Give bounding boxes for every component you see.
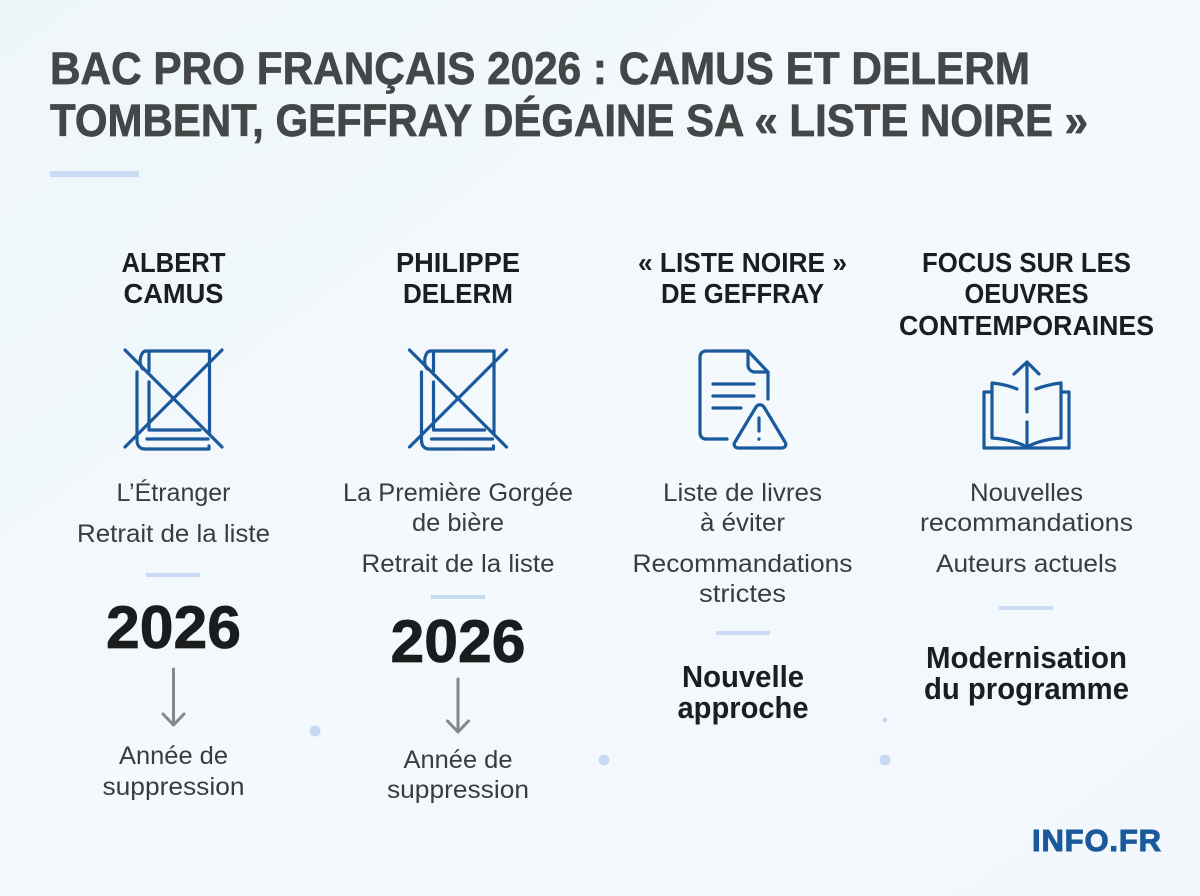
title: TOMBENT, GEFFRAY DÉGAINE SA « LISTE NOIRE » [50,95,1088,146]
text: L'Étranger, retrait: L’Étranger [116,478,230,507]
heading: Albert Camus [122,247,226,309]
icon: document with warning [700,351,786,448]
statement: modernisation du programme [924,640,1129,706]
heading: liste noire de Geffray: DE GEFFRAY [661,278,824,309]
text: nouvelles recommandations, auteurs actuels: recommandations [920,509,1133,537]
heading: liste noire de Geffray: « LISTE NOIRE » [638,247,847,278]
text: nouvelles recommandations, auteurs actuels: Nouvelles [970,479,1083,507]
icon: crossed-out book [410,350,506,449]
caption: année de suppression: suppression [387,776,529,804]
heading: focus sur les oeuvres contemporaines: FOCUS SUR LES [922,247,1131,278]
heading: focus sur les oeuvres contemporaines [899,247,1154,341]
title [50,43,1088,146]
text: liste de livres, recommandations: strictes [699,580,786,608]
text: L'Étranger, retrait: Retrait de la liste [77,520,270,548]
arrow: down [448,679,468,732]
caption: année de suppression: Année de [119,742,228,770]
heading: Philippe Delerm: DELERM [403,278,513,309]
text: La Première Gorgée de bière, retrait: La Première Gorgée [343,479,573,507]
panel: oeuvres contemporaines [899,247,1154,706]
text: liste de livres, recommandations [632,479,852,608]
title underline [50,171,139,177]
caption: année de suppression: suppression [102,773,244,801]
heading: liste noire de Geffray [638,247,847,309]
text: La Première Gorgée de bière, retrait: de bière [412,509,504,537]
heading: focus sur les oeuvres contemporaines: OEUVRES [964,278,1088,309]
text: L'Étranger, retrait [77,478,270,548]
statement: modernisation du programme: Modernisation [926,640,1127,675]
text: liste de livres, recommandations: Recommandations [632,550,852,578]
text: nouvelles recommandations, auteurs actuels [920,479,1133,578]
logo: INFO.FR: INFO.FR [1032,823,1161,858]
arrow: down [163,669,184,725]
heading: focus sur les oeuvres contemporaines: CONTEMPORAINES [899,310,1154,341]
caption: année de suppression [102,742,244,801]
icon: open book with up arrow [984,362,1069,448]
decorative dots [310,718,890,766]
year: 2026: 2026 [390,608,526,675]
title: BAC PRO FRANÇAIS 2026 : CAMUS ET DELERM [50,43,1030,94]
text: liste de livres, recommandations: à éviter [700,509,785,537]
heading: Albert Camus: CAMUS [124,278,224,309]
panel: Albert Camus [77,247,270,801]
heading: Philippe Delerm: PHILIPPE [396,247,520,278]
panel: liste noire [632,247,852,725]
statement: nouvelle approche: approche [678,690,808,725]
panel: Philippe Delerm [343,247,573,804]
heading: Philippe Delerm [396,247,520,309]
year: 2026: 2026 [106,594,241,661]
statement: modernisation du programme: du programme [924,671,1129,706]
text: liste de livres, recommandations: Liste de livres [663,479,822,507]
text: La Première Gorgée de bière, retrait: Retrait de la liste [362,550,554,578]
caption: année de suppression [387,746,529,804]
icon: crossed-out book [125,350,222,449]
text: La Première Gorgée de bière, retrait [343,479,573,578]
statement: nouvelle approche: Nouvelle [682,659,804,694]
heading: Albert Camus: ALBERT [122,247,226,278]
statement: nouvelle approche [678,659,808,725]
caption: année de suppression: Année de [404,746,512,774]
text: nouvelles recommandations, auteurs actuels: Auteurs actuels [936,550,1117,578]
